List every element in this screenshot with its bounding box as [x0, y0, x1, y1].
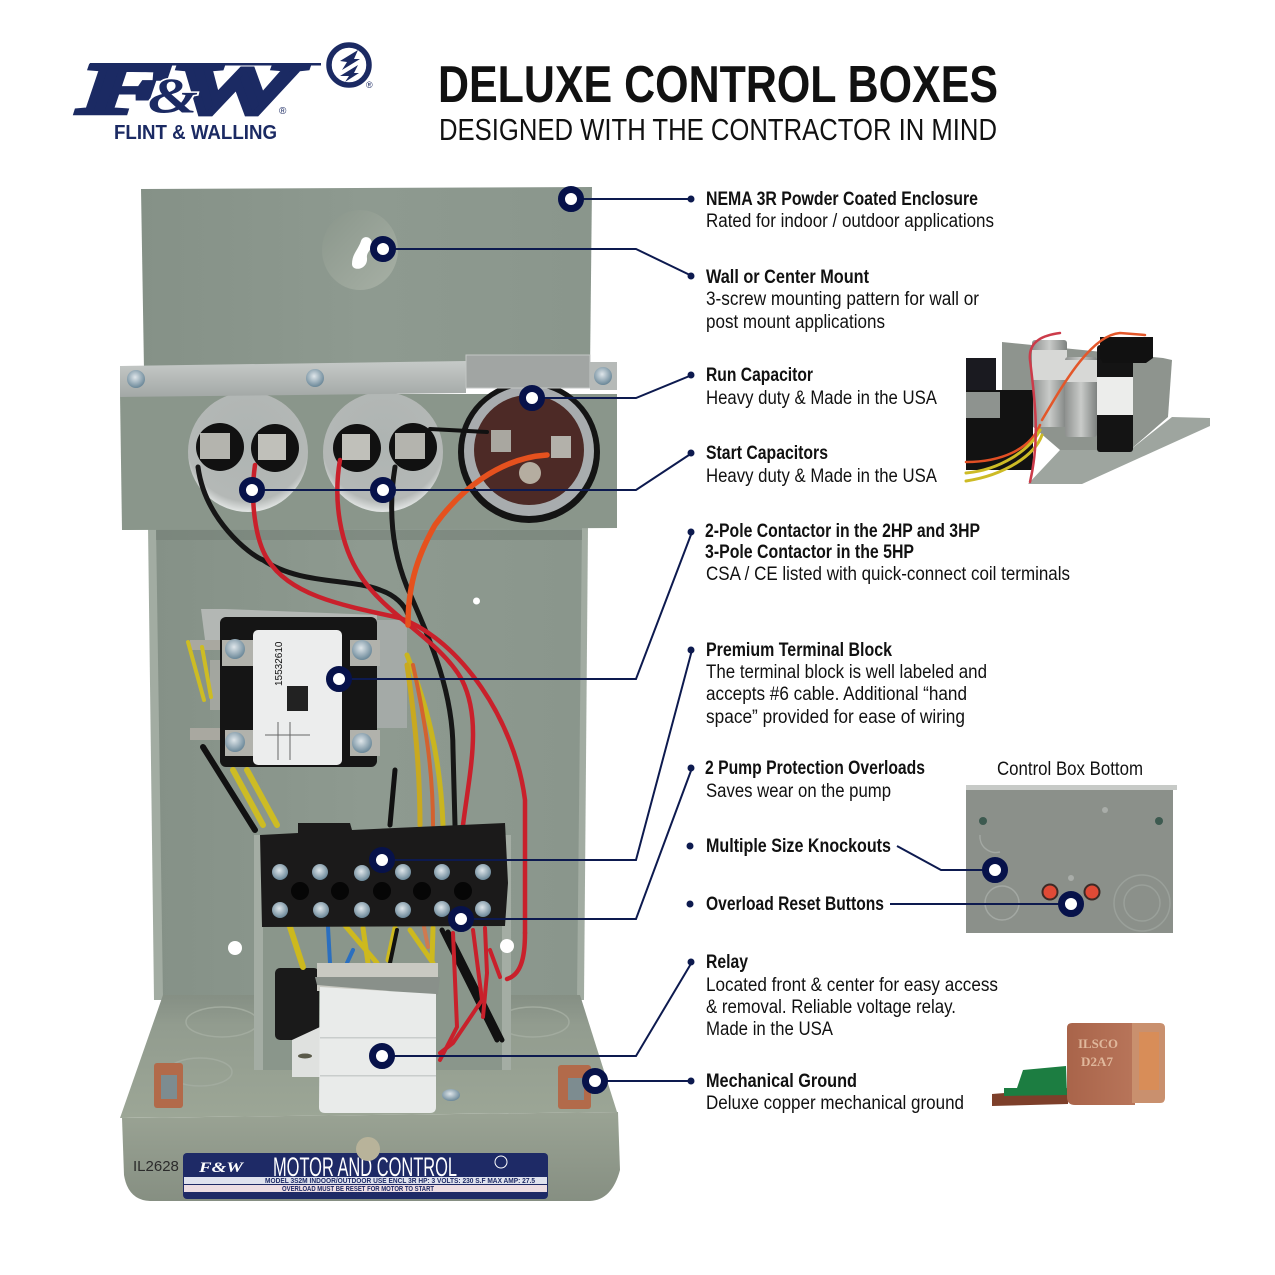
inset: mechanical ground lug: D2A7: [1081, 1054, 1113, 1069]
ground lug left: [154, 1063, 183, 1108]
logo wordmark F&W: F: [76, 49, 170, 129]
callout: NEMA enclosure: NEMA 3R Powder Coated Enclosure: [706, 189, 978, 210]
tray: [120, 995, 617, 1118]
callout: overloads: Saves wear on the pump: [706, 781, 891, 802]
callout: terminal block: [706, 640, 987, 728]
callout: mechanical ground: [706, 1071, 964, 1114]
callout: relay: & removal. Reliable voltage relay.: [706, 997, 956, 1018]
label heading: MOTOR AND CONTROL: [273, 1152, 457, 1182]
callout: terminal block: space” provided for ease of wiring: [706, 707, 965, 728]
inset caption: Control Box Bottom: [997, 759, 1143, 780]
capacitor 1: [188, 392, 308, 512]
center mounting plate: [254, 835, 511, 1070]
logo wordmark F&W: ®: [279, 106, 287, 117]
logo wordmark F&W: &: [148, 67, 198, 123]
callout: start capacitors: Heavy duty & Made in the USA: [706, 466, 937, 487]
callout: wall or center mount: post mount applications: [706, 312, 885, 333]
callout: run capacitor: [706, 365, 937, 409]
callout: mechanical ground: Mechanical Ground: [706, 1071, 857, 1092]
capacitor 2: [323, 392, 443, 512]
callout: terminal block: Premium Terminal Block: [706, 640, 892, 661]
callout: relay: Located front & center for easy access: [706, 975, 998, 996]
small hole: [473, 598, 480, 604]
callout: overloads: 2 Pump Protection Overloads: [705, 758, 925, 779]
start capacitor: [458, 381, 600, 523]
relay: [292, 963, 440, 1113]
callout: contactor: 2-Pole Contactor in the 2HP and 3HP: [705, 521, 980, 542]
inset: mechanical ground lug: [992, 1023, 1165, 1106]
callout: wall or center mount: Wall or Center Mount: [706, 267, 870, 288]
leader lines: [252, 199, 1071, 1081]
callout: run capacitor: Heavy duty & Made in the USA: [706, 388, 937, 409]
callout: relay: Made in the USA: [706, 1019, 833, 1040]
subtitle: DESIGNED WITH THE CONTRACTOR IN MIND: [439, 112, 997, 147]
callout: run capacitor: Run Capacitor: [706, 365, 813, 386]
bottom plate photo: [966, 785, 1177, 933]
callout: wall or center mount: [706, 267, 980, 333]
lower wiring: [290, 922, 525, 1060]
logo wordmark F&W: W: [170, 49, 308, 129]
logo emblem: [329, 45, 373, 90]
callout: contactor: CSA / CE listed with quick-connect coil terminals: [706, 564, 1070, 585]
callout: reset buttons: Overload Reset Buttons: [706, 894, 884, 915]
callout: relay: Relay: [706, 952, 748, 973]
title: DELUXE CONTROL BOXES: [438, 56, 998, 114]
callout: wall or center mount: 3-screw mounting pattern for wall or: [706, 289, 980, 310]
black component behind relay: [275, 968, 319, 1040]
logo: [76, 45, 373, 144]
screw on tray: [442, 1089, 460, 1101]
callout: contactor: [705, 521, 1070, 585]
inset: control box bottom: [966, 759, 1177, 933]
logo name: FLINT & WALLING: [114, 122, 277, 144]
callout: NEMA enclosure: [706, 189, 994, 232]
label details: MODEL 3S2M INDOOR/OUTDOOR USE ENCL 3R HP: 3 VOLTS: 230 S.F MAX AMP: 27.5: [265, 1178, 535, 1185]
logo wordmark F&W: [76, 49, 321, 129]
callout: knockouts: Multiple Size Knockouts: [706, 836, 891, 857]
lug stamp text: ILSCO: [1078, 1036, 1118, 1051]
bolt: [356, 1137, 380, 1161]
run/start capacitors: [188, 381, 600, 523]
model label: OVERLOAD MUST BE RESET FOR MOTOR TO START: [282, 1186, 435, 1193]
callout dots: [242, 190, 1080, 1090]
mounting holes: [228, 939, 514, 955]
callout: start capacitors: [706, 443, 937, 487]
callout: NEMA enclosure: Rated for indoor / outdoor applications: [706, 211, 994, 232]
upper wiring: [188, 429, 547, 933]
front face: [122, 1112, 620, 1201]
label logo: F&W: [198, 1160, 245, 1176]
logo emblem: ®: [366, 80, 373, 90]
lower back panel: [148, 525, 588, 1000]
model label: [183, 1152, 548, 1199]
reset buttons: [1042, 884, 1058, 900]
upper back panel: [141, 187, 592, 370]
contactor label text: 15532610: [274, 641, 285, 686]
callout: terminal block: accepts #6 cable. Additional “hand: [706, 684, 967, 705]
terminal block: [260, 823, 508, 927]
callout bullets: [686, 196, 694, 1084]
capacitor bracket: [120, 394, 617, 530]
part number: IL2628: [133, 1158, 179, 1175]
callout: terminal block: The terminal block is well labeled and: [706, 662, 987, 683]
callout: relay: [706, 952, 998, 1040]
callout: mechanical ground: Deluxe copper mechanical ground: [706, 1093, 964, 1114]
callout: start capacitors: Start Capacitors: [706, 443, 828, 464]
inset: capacitors photo: [966, 333, 1210, 484]
control box photo: [120, 187, 620, 1201]
mounting keyhole: [322, 210, 398, 290]
callout: contactor: 3-Pole Contactor in the 5HP: [705, 542, 914, 563]
callout: overloads: [705, 758, 925, 802]
ground lug right: [558, 1065, 591, 1109]
bracket straps: [120, 355, 617, 397]
contactor: [190, 609, 407, 767]
